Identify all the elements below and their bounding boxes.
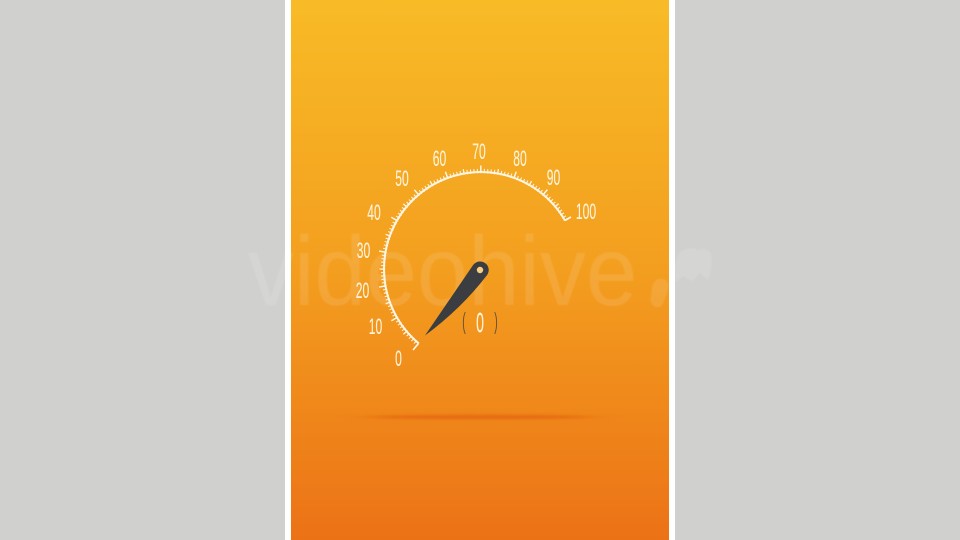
needle: [425, 261, 489, 336]
end tick at 0: [413, 343, 419, 350]
value readout: [462, 307, 498, 338]
watermark: [248, 217, 712, 327]
left bracket: (: [462, 308, 466, 334]
needle blade: [425, 261, 489, 336]
label 70: 70: [472, 139, 486, 164]
label 50: 50: [395, 166, 409, 191]
label 40: 40: [367, 200, 381, 225]
right bracket: ): [494, 308, 498, 334]
needle hub hole: [477, 267, 483, 273]
watermark word: videohive: [248, 217, 637, 327]
label 10: 10: [369, 314, 382, 339]
value: 0: [476, 307, 484, 338]
label 60: 60: [433, 146, 446, 171]
medium ticks: [382, 170, 567, 345]
gauge: [381, 169, 571, 350]
panel: orange gradient: [291, 0, 669, 540]
label 80: 80: [513, 146, 527, 171]
scale labels: [356, 139, 596, 371]
label 20: 20: [356, 278, 369, 303]
ground shadow under gauge: [365, 415, 595, 419]
watermark logo: [650, 248, 712, 307]
major ticks: [381, 169, 568, 346]
end tick at 100: [565, 217, 571, 220]
label 0: 0: [395, 346, 402, 371]
label 90: 90: [547, 165, 560, 190]
label 30: 30: [357, 238, 370, 263]
minor ticks: [383, 171, 566, 344]
gauge arc: [384, 172, 565, 343]
label 100: 100: [576, 199, 596, 224]
white card frame: [285, 0, 675, 540]
